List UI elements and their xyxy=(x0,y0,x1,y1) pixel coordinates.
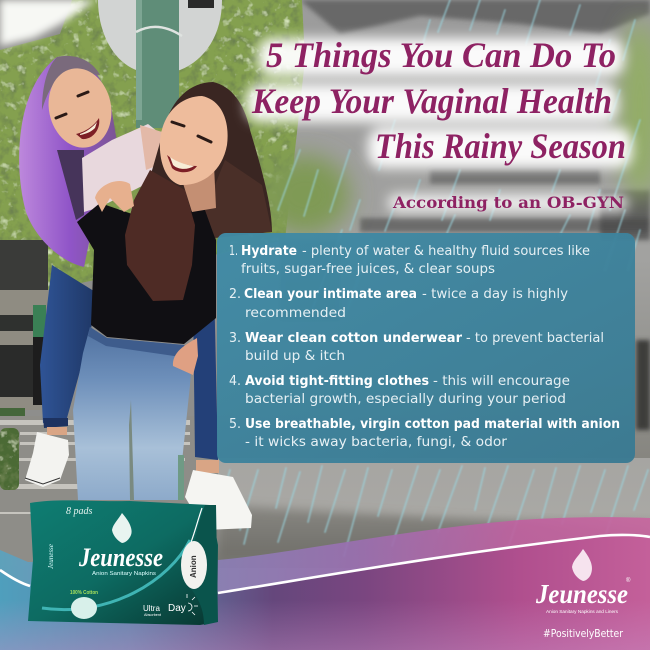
person: woman in front with long dark hair xyxy=(73,82,272,530)
sky xyxy=(0,0,96,46)
ultra label: Ultra xyxy=(143,604,160,613)
smile xyxy=(76,118,99,139)
tip 2: recommended xyxy=(245,306,346,321)
white sneaker, left xyxy=(25,432,69,487)
tip 4: 4. xyxy=(229,374,241,389)
tip 4: bacterial growth, especially during your period xyxy=(245,392,566,407)
ankle, right xyxy=(196,460,219,473)
back leg in dark jeans xyxy=(40,265,97,423)
hand on shoulder xyxy=(95,181,134,212)
shoulder xyxy=(140,125,162,170)
rain streaks xyxy=(218,0,648,556)
title xyxy=(251,35,626,166)
tip 2 xyxy=(229,287,568,321)
registered mark: ® xyxy=(626,577,631,584)
dark inner hair xyxy=(57,150,84,220)
pad count: 8 pads xyxy=(66,506,92,517)
wave bottom fade xyxy=(0,600,650,650)
hashtag: #PositivelyBetter xyxy=(543,628,624,640)
tip 3: build up & itch xyxy=(245,349,345,364)
tip 5: - it wicks away bacteria, fungi, & odor xyxy=(245,435,508,450)
jeans left and right legs xyxy=(73,327,192,500)
hand at pocket xyxy=(173,338,198,375)
logo mark xyxy=(572,549,592,581)
anion badge xyxy=(181,541,207,589)
side fold xyxy=(184,505,218,625)
tip 1: - plenty of water & healthy fluid sources like xyxy=(302,244,590,259)
tip 3 xyxy=(229,331,604,364)
title: Keep Your Vaginal Health xyxy=(251,81,612,121)
smile xyxy=(167,155,197,172)
swoosh xyxy=(42,540,190,610)
building on the right xyxy=(220,0,650,470)
tip 2: Clean your intimate area xyxy=(244,287,417,302)
rear right leg xyxy=(193,283,218,460)
translucent band xyxy=(0,517,650,650)
tip 2: 2. xyxy=(229,287,241,302)
purple hair xyxy=(19,57,120,267)
sun icon xyxy=(187,594,198,615)
brand name: Jeunesse xyxy=(535,579,628,609)
title: This Rainy Season xyxy=(375,126,626,166)
subtitle: According to an OB-GYN xyxy=(392,193,624,212)
gradient wave xyxy=(0,536,650,650)
brand name: Jeunesse xyxy=(78,543,163,572)
lower-left building front xyxy=(0,240,48,417)
neck xyxy=(182,165,216,212)
tip 3: - to prevent bacterial xyxy=(466,331,604,346)
long dark hair, back xyxy=(135,82,272,290)
top of hair xyxy=(42,56,100,110)
tip 5: Use breathable, virgin cotton pad material with anion xyxy=(245,417,620,432)
tip 5: 5. xyxy=(229,417,241,432)
sub brand: Anion Sanitary Napkins and Liners xyxy=(546,609,619,614)
tip 2: - twice a day is highly xyxy=(422,287,568,302)
tip 3: Wear clean cotton underwear xyxy=(245,331,463,346)
bottom wave banner xyxy=(0,517,650,650)
ankle xyxy=(47,427,67,435)
eyes xyxy=(172,122,211,142)
white sneaker, right xyxy=(185,470,252,530)
tip 4 xyxy=(229,374,570,407)
lower hair, left lock xyxy=(125,170,195,301)
tip 1: fruits, sugar-free juices, & clear soups xyxy=(241,262,495,277)
pack body xyxy=(28,500,218,625)
logo mark xyxy=(112,513,132,543)
tip 3: 3. xyxy=(229,331,241,346)
tip 5 xyxy=(229,417,620,450)
face xyxy=(41,62,119,154)
black top xyxy=(77,203,216,344)
eyes xyxy=(56,92,88,118)
street sign and pole xyxy=(98,0,222,128)
day label: Day xyxy=(168,603,186,614)
green label: 100% Cotton xyxy=(70,590,98,596)
product: Jeunesse sanitary napkin pack xyxy=(28,500,218,625)
lower hair, right lock xyxy=(205,160,272,238)
pad illustration xyxy=(71,597,97,619)
tip 1: 1. xyxy=(229,244,238,259)
side brand: Jeunesse xyxy=(47,544,55,569)
tip 1: Hydrate xyxy=(241,244,297,259)
white top xyxy=(82,124,162,212)
tip 4: - this will encourage xyxy=(433,374,570,389)
white curve xyxy=(0,535,650,593)
person: purple-haired woman, back xyxy=(19,56,219,487)
anion badge: Anion xyxy=(189,555,198,578)
tip 4: Avoid tight-fitting clothes xyxy=(245,374,429,389)
title glow xyxy=(246,38,632,212)
hedge xyxy=(0,428,19,490)
tip 1 xyxy=(229,244,590,277)
sub brand: Anion Sanitary Napkins xyxy=(92,571,157,577)
brand logo, bottom right xyxy=(535,549,631,640)
gap between legs xyxy=(129,400,134,500)
street xyxy=(0,416,650,568)
trees xyxy=(0,0,650,300)
title: 5 Things You Can Do To xyxy=(266,35,616,75)
panel: five tips xyxy=(217,233,635,463)
absorbent label: Absorbent xyxy=(144,613,161,617)
face xyxy=(160,96,228,185)
